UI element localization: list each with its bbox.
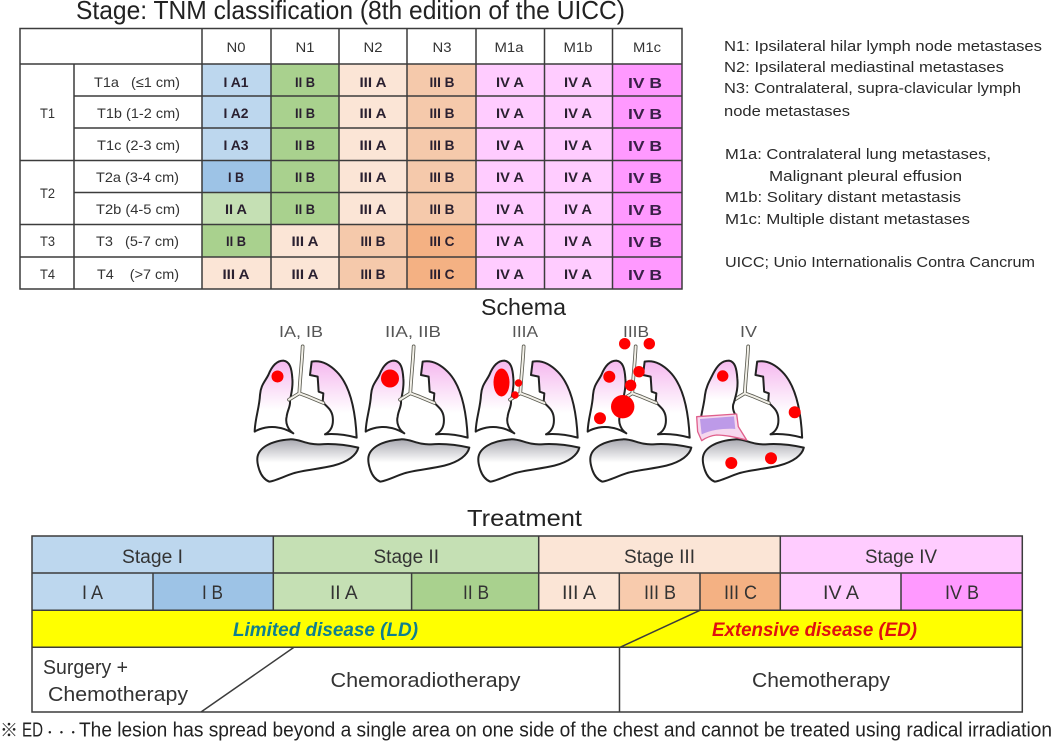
row: T2b: T2b (4-5 cm) bbox=[96, 201, 180, 217]
schema panel: stage IIIA: IIIA bbox=[512, 324, 539, 341]
sub-stage row: III B bbox=[644, 583, 676, 604]
schema panel: stage IIIB: IIIB bbox=[623, 324, 649, 341]
row group labels T1 to T4: T2 bbox=[40, 185, 55, 201]
schema panel: stage IIIB bbox=[588, 324, 691, 482]
row: T4: IV A bbox=[496, 267, 524, 282]
row: T2a bbox=[96, 160, 682, 192]
row: T3: T3 (5-7 cm) bbox=[96, 233, 179, 249]
row: T1a: IV A bbox=[496, 75, 524, 90]
row: T1c: IV B bbox=[628, 139, 662, 155]
schema panel: stage IIA, IIB: IIA, IIB bbox=[385, 324, 441, 341]
disease extent band bbox=[32, 610, 1022, 647]
treatment row bbox=[43, 657, 890, 706]
row group labels T1 to T4: T4 bbox=[40, 266, 55, 282]
sub-stage row bbox=[32, 573, 1022, 610]
text block: M stage definitions: M1c: Multiple distant metastases bbox=[725, 211, 970, 228]
sub-stage row: II A bbox=[330, 583, 358, 604]
treatment table bbox=[32, 536, 1022, 712]
schema panel: stage IA, IB: IA, IB bbox=[279, 324, 323, 341]
stage header row bbox=[32, 536, 1022, 573]
row: T4: IV B bbox=[628, 268, 662, 284]
row: T1c: III A bbox=[360, 138, 387, 153]
row: T4: T4 (>7 cm) bbox=[97, 266, 179, 282]
stage header row: Stage IV bbox=[865, 547, 937, 568]
icon: pleural effusion patch bbox=[697, 414, 747, 441]
row group labels T1 to T4: T3 bbox=[40, 233, 55, 249]
row: T2a: III B bbox=[430, 170, 455, 185]
row group labels T1 to T4: T1 bbox=[40, 105, 55, 121]
treatment row: Chemotherapy bbox=[48, 684, 188, 706]
row: T4: III A bbox=[222, 267, 250, 282]
row: T1b bbox=[97, 96, 682, 128]
row: T3: IV A bbox=[564, 234, 592, 249]
row: T2b: IV A bbox=[496, 202, 524, 217]
row: T3 bbox=[96, 224, 682, 257]
table header row bbox=[226, 40, 661, 55]
table header row: M1c bbox=[633, 40, 661, 55]
text block: N stage definitions: N3: Contralateral, supra-clavicular lymph bbox=[724, 80, 1021, 97]
table header row: M1a bbox=[494, 40, 524, 55]
row: T1a: IV A bbox=[564, 75, 592, 90]
row: T2a: III A bbox=[360, 170, 387, 185]
text block: N stage definitions: node metastases bbox=[724, 103, 850, 120]
row: T2b: IV A bbox=[564, 202, 592, 217]
row: T1a: III B bbox=[430, 75, 455, 90]
row: T2a: II B bbox=[295, 170, 315, 185]
row: T3: IV A bbox=[496, 234, 524, 249]
treatment row: Chemotherapy bbox=[752, 670, 890, 692]
sub-stage row: I B bbox=[202, 583, 223, 604]
row: T1a: II B bbox=[295, 75, 315, 90]
table header row: N0 bbox=[226, 40, 246, 55]
row: T3: III C bbox=[430, 234, 455, 249]
row: T1c: II B bbox=[295, 138, 315, 153]
sub-stage row: III C bbox=[724, 583, 757, 604]
table header row: N3 bbox=[432, 40, 452, 55]
row: T2a: I B bbox=[228, 170, 244, 185]
row: T1b: III A bbox=[360, 106, 387, 121]
row: T1a: T1a (≤1 cm) bbox=[94, 74, 180, 90]
row: T2b: II B bbox=[295, 202, 315, 217]
sub-stage row: IV A bbox=[823, 583, 859, 604]
text block: M stage definitions: M1b: Solitary distant metastasis bbox=[725, 189, 961, 206]
row: T2b: III A bbox=[360, 202, 387, 217]
text block: N stage definitions bbox=[724, 38, 1042, 120]
table: TNM stage grid bbox=[20, 28, 682, 289]
text block: N stage definitions: N1: Ipsilateral hilar lymph node metastases bbox=[724, 38, 1042, 55]
row: T4: IV A bbox=[564, 267, 592, 282]
row: T3: IV B bbox=[628, 235, 662, 251]
row: T1c: I A3 bbox=[224, 138, 249, 153]
row: T1b: I A2 bbox=[224, 106, 248, 121]
footnote: ED bbox=[22, 720, 43, 742]
table header row: N2 bbox=[364, 40, 382, 55]
row: T2a: IV A bbox=[564, 170, 592, 185]
table header row: M1b bbox=[564, 40, 592, 55]
row: T4: III C bbox=[430, 267, 455, 282]
row: T3: III A bbox=[292, 234, 319, 249]
row: T2b: III B bbox=[430, 202, 455, 217]
row: T1a bbox=[94, 64, 682, 96]
disease extent band: Extensive disease (ED) bbox=[712, 620, 917, 641]
row: T1b: T1b (1-2 cm) bbox=[97, 105, 180, 121]
row: T2b: IV B bbox=[628, 203, 662, 219]
schema panel: stage IV bbox=[697, 324, 804, 482]
row: T1c: T1c (2-3 cm) bbox=[97, 137, 180, 153]
row: T1c: IV A bbox=[564, 138, 592, 153]
stage header row: Stage I bbox=[122, 547, 183, 568]
row: T1b: III B bbox=[430, 106, 455, 121]
text block: N stage definitions: N2: Ipsilateral mediastinal metastases bbox=[724, 59, 1004, 76]
row: T1b: IV A bbox=[564, 106, 592, 121]
row: T2a: T2a (3-4 cm) bbox=[96, 169, 179, 185]
row: T2a: IV A bbox=[496, 170, 524, 185]
row: T1c: III B bbox=[430, 138, 455, 153]
schema panel: stage IIIA bbox=[476, 324, 579, 482]
row: T1a: III A bbox=[360, 75, 387, 90]
heading: Treatment: Treatment bbox=[467, 505, 583, 531]
row: T1a: IV B bbox=[628, 76, 662, 92]
row: T2b: II A bbox=[225, 202, 247, 217]
row: T4: III B bbox=[360, 267, 386, 282]
sub-stage row: I A bbox=[82, 583, 103, 604]
row group labels T1 to T4 bbox=[40, 105, 55, 282]
row: T2a: IV B bbox=[628, 171, 662, 187]
treatment row: Chemoradiotherapy bbox=[330, 670, 520, 692]
schema panel: stage IIA, IIB bbox=[366, 324, 469, 482]
row: T1b: IV A bbox=[496, 106, 524, 121]
disease extent band: Limited disease (LD) bbox=[233, 620, 418, 641]
schema panel: stage IA, IB bbox=[255, 324, 358, 482]
row: T4 bbox=[97, 257, 682, 289]
sub-stage row: II B bbox=[463, 583, 489, 604]
row: T1c bbox=[97, 128, 682, 160]
table header row: N1 bbox=[296, 40, 314, 55]
sub-stage row: IV B bbox=[945, 583, 979, 604]
stage header row: Stage II bbox=[374, 547, 439, 568]
text block: UICC abbreviation: UICC; Unio Internationalis Contra Cancrum bbox=[725, 254, 1035, 271]
heading: Schema: Schema bbox=[481, 294, 566, 320]
row: T1a: I A1 bbox=[224, 75, 249, 90]
footnote: ・・・ bbox=[44, 726, 79, 740]
text block: M stage definitions bbox=[725, 146, 991, 228]
row: T1b: IV B bbox=[628, 107, 662, 123]
text block: M stage definitions: Malignant pleural effusion bbox=[769, 168, 962, 185]
row: T1b: II B bbox=[295, 106, 315, 121]
row: T4: III A bbox=[292, 267, 319, 282]
text block: M stage definitions: M1a: Contralateral lung metastases, bbox=[725, 146, 991, 163]
footnote: ※ bbox=[0, 720, 18, 740]
row: T2b bbox=[96, 192, 682, 224]
row: T3: III B bbox=[360, 234, 386, 249]
schema panel: stage IV: IV bbox=[740, 324, 758, 341]
stage header row: Stage III bbox=[624, 547, 695, 568]
row: T1c: IV A bbox=[496, 138, 524, 153]
treatment row: Surgery + bbox=[43, 657, 128, 679]
sub-stage row: III A bbox=[562, 583, 596, 604]
row: T3: II B bbox=[226, 234, 246, 249]
